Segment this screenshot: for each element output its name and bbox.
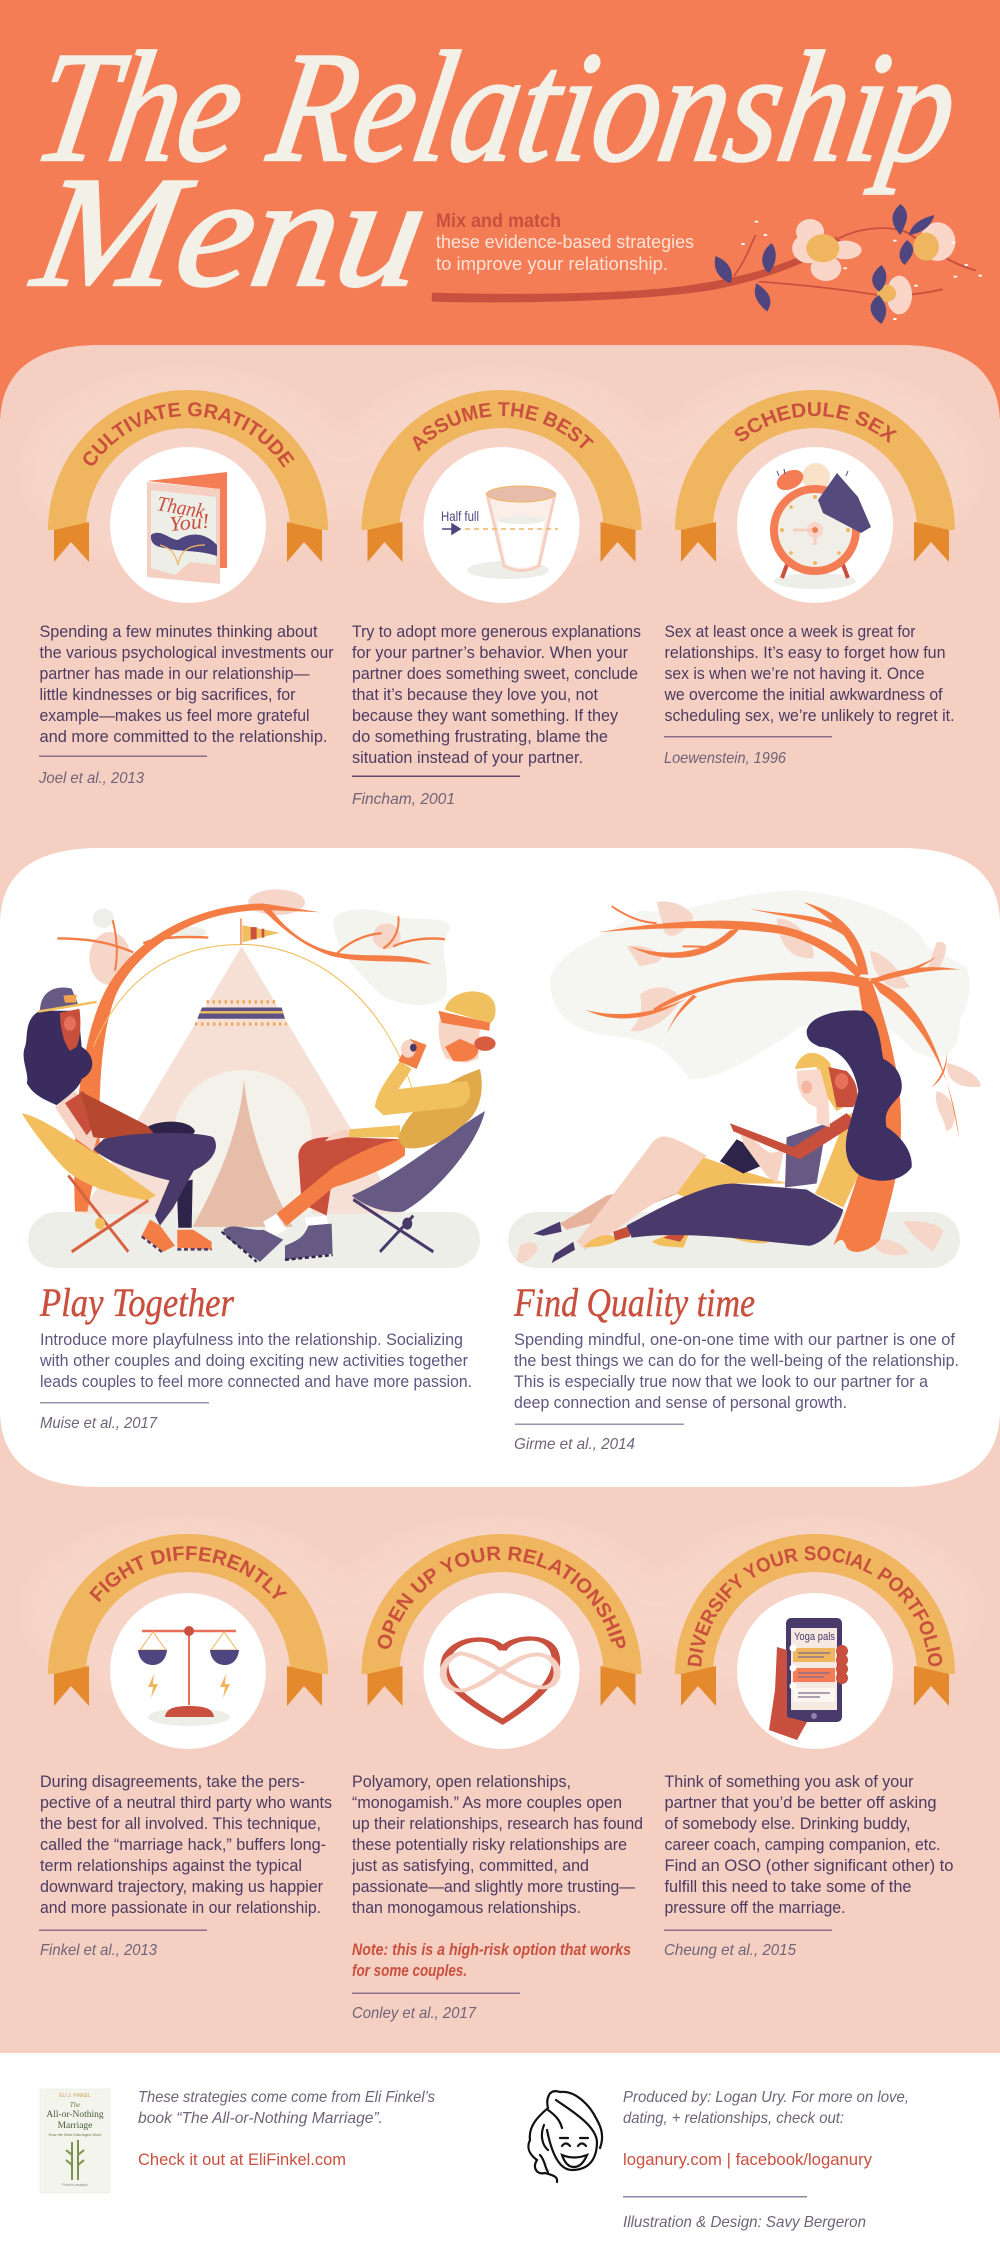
banner: cultivate gratitude: CULTIVATE GRATITUDE: [83, 402, 294, 468]
watercolour textures: [23, 370, 980, 1700]
note: Note: this is a high-risk option that works: [352, 1940, 631, 1959]
book cover: [40, 2089, 110, 2193]
text: schedule sex: [664, 622, 954, 767]
text: diversify your social portfolio: fulfill this need to take some of the: [664, 1877, 912, 1896]
icon: portrait of Logan Ury: [528, 2091, 602, 2182]
text: schedule sex: scheduling sex, we’re unlikely to regret it.: [664, 706, 954, 725]
panel: cultivate gratitude: [38, 390, 334, 787]
text: fight differently: called the “marriage hack,” buffers long-: [40, 1835, 326, 1854]
panel: diversify your social portfolio: [664, 1534, 955, 1959]
note: [352, 1940, 631, 1980]
text: schedule sex: we overcome the initial awkwardness of: [664, 685, 943, 704]
icon: phone in hand: Yoga pals: [794, 1631, 835, 1643]
banner: assume the best: ASSUME THE BEST: [412, 402, 594, 452]
text: fight differently: Finkel et al., 2013: [40, 1942, 157, 1959]
banner: fight differently: FIGHT DIFFERENTLY: [89, 1546, 288, 1602]
text: cultivate gratitude: example—makes us feel more grateful: [40, 706, 310, 725]
book cover: All-or-Nothing: [46, 2110, 104, 2120]
text: cultivate gratitude: the various psychological investments our: [40, 643, 334, 662]
tree: [585, 902, 960, 1252]
title: [22, 20, 970, 320]
intro text: to improve your relationship.: [436, 253, 668, 274]
icon: thank you card: You!: [168, 509, 210, 536]
text: play together: Introduce more playfulness into the relationship. Socializing: [40, 1331, 463, 1349]
panel: open up your relationship: [351, 1534, 643, 2022]
text: cultivate gratitude: [38, 622, 334, 787]
pink background panel: [0, 345, 1000, 2053]
text: producer credit: dating, + relationships, check out:: [623, 2110, 844, 2127]
text: open up your relationship: than monogamous relationships.: [352, 1898, 581, 1917]
text: open up your relationship: [351, 1772, 643, 2022]
header background: [0, 0, 1000, 420]
text: schedule sex: Loewenstein, 1996: [664, 750, 786, 767]
panel: fight differently: [39, 1534, 332, 1959]
heading: find quality time: Find Quality time: [513, 1280, 755, 1325]
text: assume the best: situation instead of your partner.: [352, 748, 583, 767]
icon: thank you card: Thank: [155, 491, 207, 523]
text: diversify your social portfolio: Cheung et al., 2015: [664, 1942, 796, 1959]
text: find quality time: Girme et al., 2014: [514, 1436, 635, 1453]
panel: play together: [22, 889, 496, 1432]
text: open up your relationship: “monogamish.” As more couples open: [352, 1793, 622, 1812]
book cover: Marriage: [58, 2121, 92, 2131]
icon: thank you card: [110, 447, 266, 603]
text: assume the best: [352, 622, 641, 808]
text: book credit: [138, 2089, 435, 2169]
text: play together: [39, 1331, 472, 1432]
banner: assume the best: [362, 390, 642, 562]
book cover: Finkel’s analysis: [62, 2183, 88, 2187]
text: assume the best: for your partner’s behavior. When your: [352, 643, 628, 662]
text: fight differently: pective of a neutral third party who wants: [40, 1793, 332, 1812]
icon: alarm clock with underwear: [737, 447, 893, 603]
icon: blossom branch: [432, 204, 982, 324]
text: diversify your social portfolio: [664, 1772, 954, 1959]
book cover: The: [70, 2101, 80, 2109]
text: find quality time: [514, 1331, 959, 1453]
text: cultivate gratitude: little kindnesses or big sacrifices, for: [40, 685, 296, 704]
woman on yellow chair: [22, 987, 216, 1253]
banner: schedule sex: SCHEDULE SEX: [734, 402, 898, 444]
text: diversify your social portfolio: of somebody else. Drinking buddy,: [664, 1814, 910, 1833]
text: assume the best: because they want something. If they: [352, 706, 618, 725]
text: fight differently: term relationships against the typical: [40, 1856, 302, 1875]
text: cultivate gratitude: Spending a few minutes thinking about: [40, 622, 318, 641]
text: open up your relationship: these potentially risky relationships are: [352, 1835, 627, 1854]
text: book credit: Check it out at EliFinkel.com: [138, 2150, 346, 2169]
book cover: How the Best Marriages Work: [48, 2132, 102, 2137]
text: fight differently: During disagreements, take the pers-: [40, 1772, 305, 1791]
text: fight differently: the best for all involved. This technique,: [40, 1814, 321, 1833]
icon: heart with infinity: [424, 1593, 580, 1749]
icon: half full glass: Half full: [441, 508, 479, 524]
text: diversify your social portfolio: Think of something you ask of your: [664, 1772, 914, 1791]
text: find quality time: Spending mindful, one-on-one time with our partner is one of: [514, 1331, 955, 1349]
text: fight differently: and more passionate in our relationship.: [40, 1898, 321, 1917]
panel: schedule sex: [664, 390, 955, 767]
text: play together: with other couples and doing exciting new activities together: [39, 1352, 468, 1370]
text: fight differently: downward trajectory, making us happier: [40, 1877, 323, 1896]
illustration: camping couple: [22, 889, 496, 1268]
banner: fight differently: [48, 1534, 328, 1706]
title: Menu: [22, 145, 440, 320]
heading: play together: Play Together: [39, 1280, 234, 1325]
text: producer credit: [623, 2089, 909, 2231]
text: diversify your social portfolio: partner that you’d be better off asking: [664, 1793, 936, 1812]
banner: diversify your social portfolio: DIVERSIFY YOUR SOCIAL PORTFOLIO: [688, 1546, 942, 1666]
text: cultivate gratitude: and more committed to the relationship.: [40, 727, 328, 746]
text: find quality time: the best things we can do for the well-being of the relationship.: [514, 1352, 959, 1370]
text: producer credit: Illustration & Design: Savy Bergeron: [623, 2214, 866, 2231]
illustration: couple under tree: [508, 890, 980, 1268]
text: schedule sex: Sex at least once a week is great for: [664, 622, 916, 641]
white panel: [0, 848, 1000, 1487]
text: assume the best: Try to adopt more generous explanations: [352, 622, 641, 641]
text: producer credit: Produced by: Logan Ury. For more on love,: [623, 2089, 909, 2106]
text: schedule sex: relationships. It’s easy to forget how fun: [664, 643, 946, 662]
text: open up your relationship: up their relationships, research has found: [352, 1814, 643, 1833]
text: assume the best: Fincham, 2001: [352, 791, 455, 808]
text: find quality time: deep connection and sense of personal growth.: [514, 1394, 847, 1412]
footer: [0, 2053, 1000, 2260]
text: diversify your social portfolio: pressure off the marriage.: [664, 1898, 846, 1917]
panel: assume the best: [352, 390, 642, 808]
text: diversify your social portfolio: Find an OSO (other significant other) to: [664, 1856, 954, 1875]
icon: half full glass: [424, 447, 580, 603]
text: open up your relationship: passionate—and slightly more trusting—: [352, 1877, 635, 1896]
text: assume the best: do something frustrating, blame the: [352, 727, 608, 746]
text: fight differently: [39, 1772, 332, 1959]
text: play together: leads couples to feel more connected and have more passion.: [40, 1373, 472, 1391]
intro text: these evidence-based strategies: [436, 231, 694, 252]
text: find quality time: This is especially true now that we look to our partner for a: [514, 1373, 929, 1391]
text: open up your relationship: Conley et al., 2017: [352, 2005, 477, 2022]
banner: open up your relationship: [362, 1534, 642, 1706]
note: for some couples.: [352, 1961, 467, 1980]
icon: balance scale: [110, 1593, 266, 1749]
text: open up your relationship: just as satisfying, committed, and: [351, 1856, 589, 1875]
panel: find quality time: [508, 890, 980, 1453]
text: producer credit: loganury.com | facebook/loganury: [623, 2150, 872, 2169]
text: assume the best: partner does something sweet, conclude: [352, 664, 638, 683]
text: cultivate gratitude: Joel et al., 2013: [38, 770, 144, 787]
icon: phone in hand: [737, 1593, 893, 1749]
banner: open up your relationship: OPEN UP YOUR RELATIONSHIP: [378, 1546, 626, 1649]
text: book credit: book “The All-or-Nothing Marriage”.: [138, 2110, 383, 2127]
text: cultivate gratitude: partner has made in our relationship—: [40, 664, 310, 683]
banner: cultivate gratitude: [48, 390, 328, 562]
text: open up your relationship: Polyamory, open relationships,: [352, 1772, 571, 1791]
text: schedule sex: sex is when we’re not having it. Once: [664, 664, 924, 683]
text: diversify your social portfolio: career coach, camping companion, etc.: [664, 1835, 940, 1854]
intro text: Mix and match: [436, 211, 561, 232]
banner: diversify your social portfolio: [675, 1534, 955, 1706]
text: book credit: These strategies come come from Eli Finkel’s: [138, 2089, 435, 2106]
book cover: ELI J. FINKEL: [59, 2093, 91, 2099]
text: play together: Muise et al., 2017: [40, 1415, 158, 1432]
text: assume the best: that it’s because they love you, not: [352, 685, 598, 704]
banner: schedule sex: [675, 390, 955, 562]
intro text: [436, 211, 694, 274]
man on purple chair: [222, 991, 496, 1262]
